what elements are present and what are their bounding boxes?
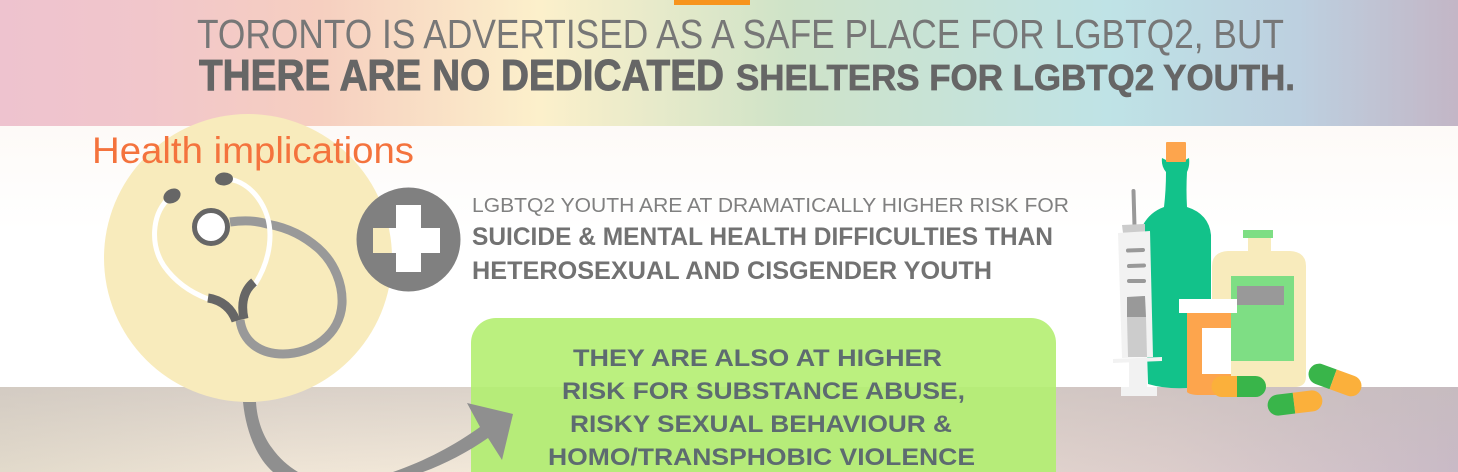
- background: rainbow band: [0, 0, 1458, 126]
- callout line 3: RISKY SEXUAL BEHAVIOUR &: [570, 411, 952, 438]
- icon: medical cross badge: [356, 188, 460, 292]
- callout line 2: RISK FOR SUBSTANCE ABUSE,: [562, 378, 965, 405]
- curved arrow: [243, 402, 513, 472]
- risk line 2: SUICIDE & MENTAL HEALTH DIFFICULTIES THAN: [472, 223, 1053, 251]
- callout: green box: [471, 318, 1056, 472]
- title line 2 emphasis: THERE ARE NO DEDICATED: [199, 51, 724, 100]
- background: textured floor band: [0, 387, 1458, 472]
- cream flask: [1212, 230, 1306, 387]
- callout line 4: HOMO/TRANSPHOBIC VIOLENCE: [548, 444, 975, 471]
- cream circle: [104, 114, 392, 402]
- syringe: [1113, 191, 1162, 396]
- title: [197, 11, 1295, 100]
- title line 1: TORONTO IS ADVERTISED AS A SAFE PLACE FOR LGBTQ2, BUT: [197, 11, 1284, 57]
- capsule 3: [1306, 361, 1364, 399]
- risk line 1: LGBTQ2 YOUTH ARE AT DRAMATICALLY HIGHER RISK FOR: [472, 195, 1069, 217]
- capsule 1: [1212, 376, 1266, 397]
- background: white band: [0, 126, 1458, 387]
- risk line 3: HETEROSEXUAL AND CISGENDER YOUTH: [472, 257, 992, 285]
- orange pill bottle: [1179, 299, 1237, 395]
- risk text block: [472, 195, 1069, 285]
- callout line 1: THEY ARE ALSO AT HIGHER: [573, 345, 942, 372]
- icon: medicine group: [1113, 142, 1364, 417]
- title line 2 remainder: SHELTERS FOR LGBTQ2 YOUTH.: [736, 57, 1295, 98]
- icon: stethoscope: [155, 172, 342, 354]
- orange tab: [674, 0, 750, 5]
- section heading: Health implications: [92, 130, 414, 171]
- capsule 2: [1266, 389, 1324, 417]
- green bottle: [1143, 142, 1211, 388]
